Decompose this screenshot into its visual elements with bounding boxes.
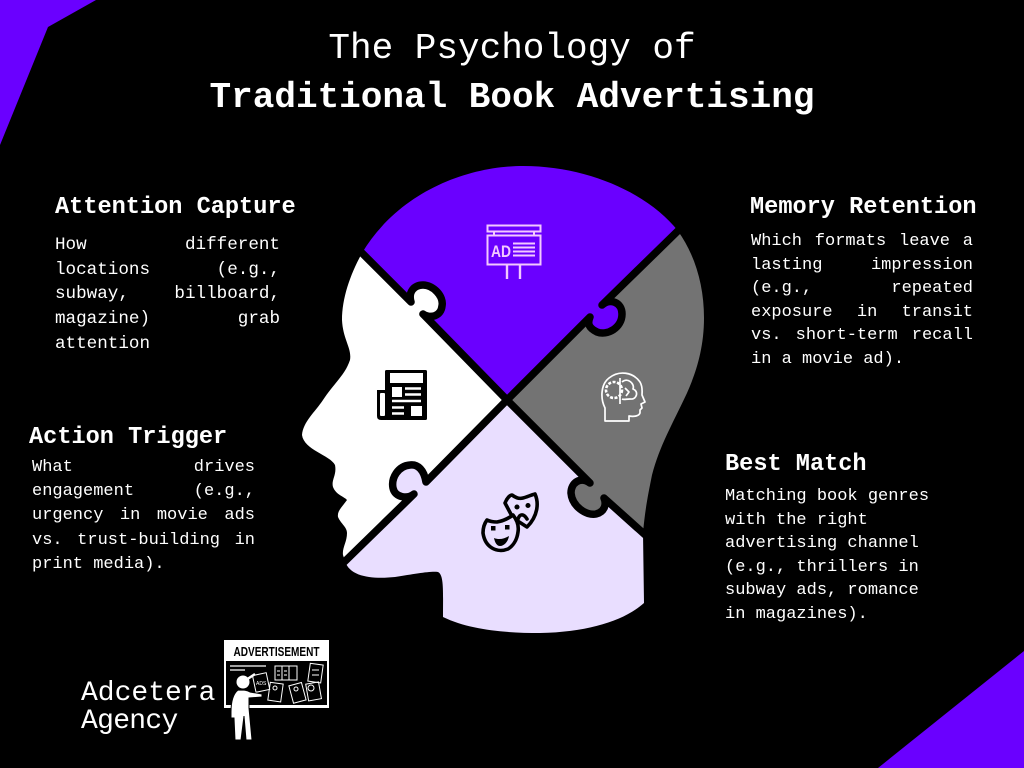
panel: lavender puzzle piece — [345, 400, 644, 633]
illustration: advertisement board with presenter: ADS — [256, 681, 267, 687]
body: attention capture: magazine) grab — [55, 309, 280, 329]
decorative corner: top left — [0, 0, 96, 145]
logo: Adcetera Agency wordmark — [81, 678, 215, 737]
body: best match: with the right — [725, 511, 868, 530]
body: best match — [725, 487, 929, 624]
body: best match: Matching book genres — [725, 487, 929, 506]
text block: attention capture — [55, 194, 296, 354]
logo: Adcetera Agency wordmark: Agency — [81, 706, 178, 737]
body: memory retention: Which formats leave a — [751, 232, 973, 251]
body: attention capture: attention — [55, 334, 150, 354]
icon: newspaper — [377, 370, 427, 420]
panel: grey puzzle piece — [507, 231, 704, 533]
icon: head with brain — [602, 373, 645, 421]
title: Traditional Book Advertising — [210, 77, 814, 118]
body: action trigger: What drives — [32, 458, 255, 477]
body: memory retention — [751, 232, 973, 369]
body: best match: in magazines). — [725, 605, 868, 624]
puzzle dividers — [335, 221, 688, 571]
body: action trigger: vs. trust-building in — [32, 531, 255, 550]
illustration: advertisement board with presenter: ADVERTISEMENT — [234, 644, 320, 659]
decorative corner: bottom right — [878, 651, 1024, 768]
body: memory retention: vs. short-term recall — [751, 326, 973, 345]
body: action trigger: engagement (e.g., — [32, 482, 255, 501]
body: attention capture: subway, billboard, — [55, 284, 280, 304]
heading: action trigger: Action Trigger — [29, 424, 227, 451]
icon: sad theatre mask — [505, 494, 537, 527]
logo: Adcetera Agency wordmark: Adcetera — [81, 678, 215, 709]
body: memory retention: in a movie ad). — [751, 350, 904, 369]
text block: memory retention — [750, 194, 977, 369]
heading: attention capture: Attention Capture — [55, 194, 296, 221]
body: attention capture: locations (e.g., — [55, 260, 280, 280]
body: best match: (e.g., thrillers in — [725, 558, 919, 577]
icon: happy theatre mask — [483, 515, 518, 550]
body: memory retention: (e.g., repeated — [751, 279, 973, 298]
body: best match: advertising channel — [725, 534, 919, 553]
text block: best match — [725, 451, 929, 624]
body: action trigger: print media). — [32, 555, 165, 574]
body: memory retention: exposure in transit — [751, 303, 973, 322]
heading: memory retention: Memory Retention — [750, 194, 977, 221]
title: The Psychology of — [328, 28, 696, 69]
body: action trigger: urgency in movie ads — [32, 506, 255, 525]
text block: action trigger — [29, 424, 255, 574]
body: best match: subway ads, romance — [725, 581, 919, 600]
icon: billboard — [488, 226, 540, 279]
body: attention capture — [55, 235, 280, 354]
heading: best match: Best Match — [725, 451, 867, 478]
panel: purple puzzle piece — [362, 166, 678, 400]
panel: white puzzle piece — [302, 253, 507, 561]
body: action trigger — [32, 458, 255, 574]
body: memory retention: lasting impression — [751, 256, 973, 275]
icon: billboard: AD — [491, 242, 511, 261]
title — [210, 28, 814, 118]
body: attention capture: How different — [55, 235, 280, 255]
